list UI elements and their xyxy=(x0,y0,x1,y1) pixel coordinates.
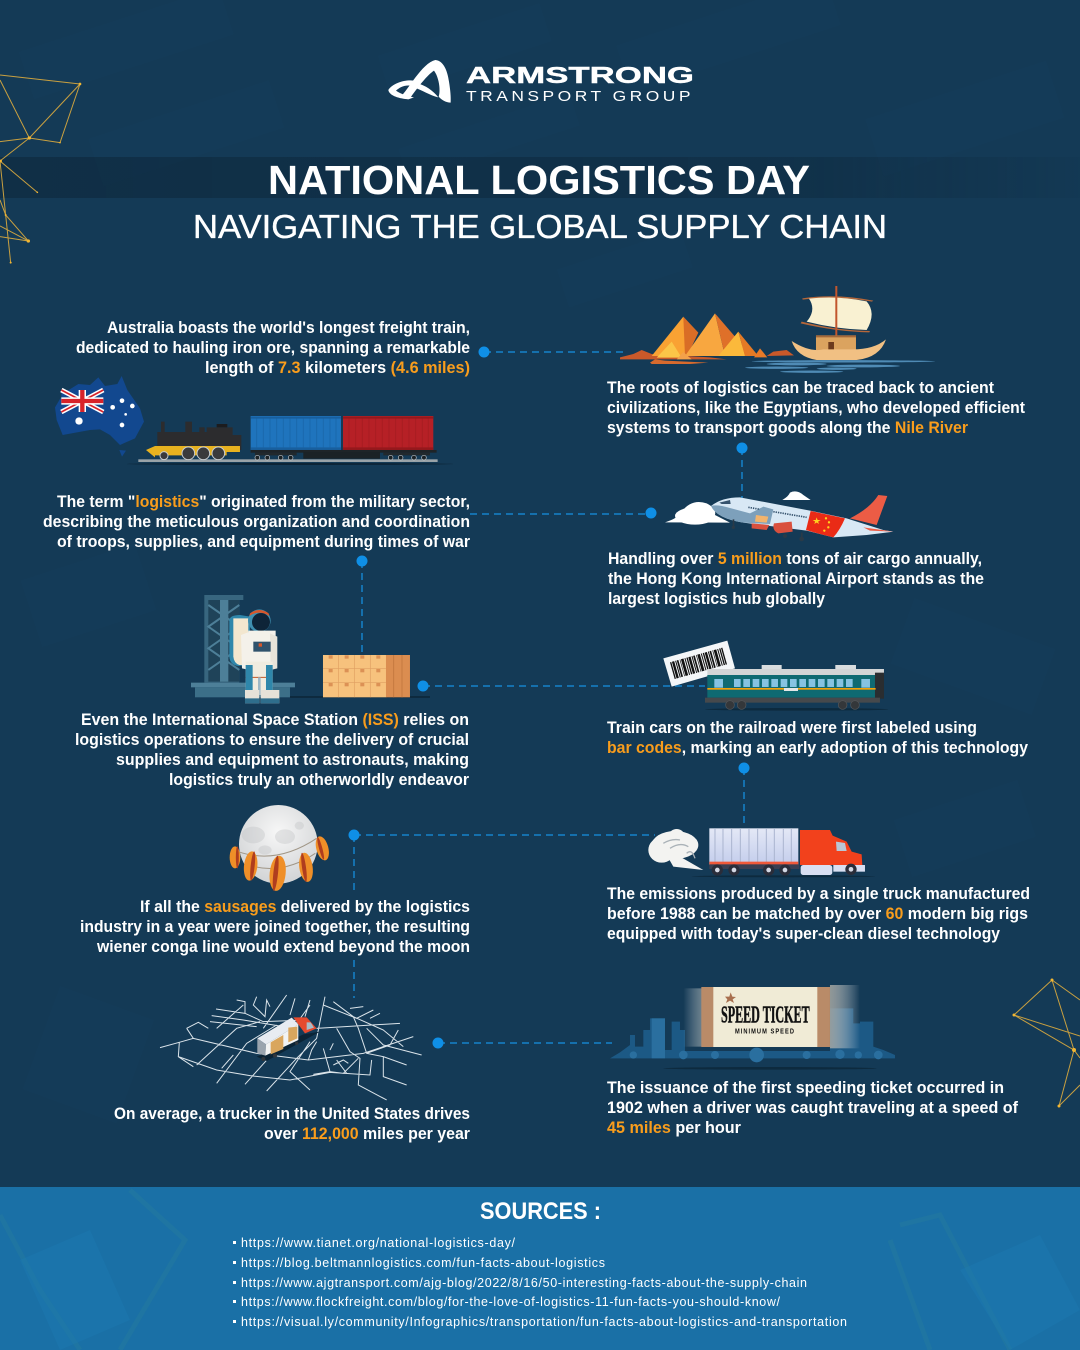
train body xyxy=(705,665,884,709)
text: emissions: before 1988 can be matched by over 60 modern big rigs xyxy=(607,905,1028,923)
cargo door xyxy=(755,515,768,523)
text: sausages: If all the sausages delivered by the logistics xyxy=(140,898,470,916)
illustration: astronaut and cargo xyxy=(191,595,430,703)
rope xyxy=(238,838,317,868)
logo wordmark: ARMSTRONG xyxy=(466,62,694,88)
text: logistics origin xyxy=(43,493,471,551)
sources band xyxy=(0,1187,1080,1350)
text: logistics origin: describing the meticulous organization and coordination xyxy=(43,513,470,531)
text: Egyptians xyxy=(607,379,1025,437)
sources list: https://www.flockfreight.com/blog/for-the-love-of-logistics-11-fun-facts-you-should-know/ xyxy=(241,1295,781,1309)
connector dots xyxy=(348,346,750,1048)
illustration: Australia map and flag xyxy=(55,376,144,457)
water xyxy=(745,360,935,373)
text: air cargo xyxy=(608,550,984,608)
text: bar codes: bar codes, marking an early adoption of this technology xyxy=(607,739,1029,757)
illustration: freight train xyxy=(127,416,453,465)
shadow xyxy=(663,1067,877,1070)
text: International Space Station: logistics operations to ensure the delivery of crucial xyxy=(75,731,469,749)
text: emissions: equipped with today's super-clean diesel technology xyxy=(607,925,1001,943)
ticket xyxy=(701,987,830,1047)
red container xyxy=(343,416,433,450)
pyramids xyxy=(620,313,794,364)
launch tower xyxy=(191,595,295,697)
moon xyxy=(239,805,318,884)
illustration: speeding ticket and skyline xyxy=(610,985,895,1070)
text: longest freight train: length of 7.3 kilometers (4.6 miles) xyxy=(205,359,470,377)
hot dogs xyxy=(230,835,331,892)
text: trucker miles xyxy=(114,1105,471,1143)
truck xyxy=(257,1017,320,1061)
sources list xyxy=(233,1236,847,1329)
locomotive xyxy=(146,422,241,460)
blue container xyxy=(251,416,341,450)
smoke xyxy=(648,829,703,870)
text: emissions: The emissions produced by a single truck manufactured xyxy=(607,885,1030,903)
sources list: https://www.tianet.org/national-logistics-day/ xyxy=(241,1236,516,1250)
text: longest freight train xyxy=(76,319,470,377)
text: bar codes xyxy=(607,719,1029,757)
road network xyxy=(160,995,422,1100)
sources list: https://www.ajgtransport.com/ajg-blog/2022/8/16/50-interesting-facts-about-the-supply-chain xyxy=(241,1276,807,1290)
engines xyxy=(773,522,793,533)
text: Egyptians: systems to transport goods along the Nile River xyxy=(607,419,969,437)
ticket subtext: MINIMUM SPEED xyxy=(735,1027,795,1036)
illustration: cargo plane xyxy=(665,491,893,541)
clouds xyxy=(665,491,811,525)
text: speeding ticket xyxy=(607,1079,1018,1137)
tail fin xyxy=(850,495,887,525)
flag livery xyxy=(806,511,845,537)
Australia map xyxy=(55,376,144,457)
title: NATIONAL LOGISTICS DAY xyxy=(268,157,810,203)
ticket text: SPEED TICKET xyxy=(721,1002,810,1028)
skyline xyxy=(610,1008,895,1062)
network decoration: right xyxy=(1012,978,1080,1108)
text: emissions xyxy=(607,885,1030,943)
text: International Space Station: supplies and equipment to astronauts, making xyxy=(116,751,469,769)
sources heading: SOURCES : xyxy=(480,1198,601,1225)
motion blur xyxy=(683,985,860,1048)
subtitle: NAVIGATING THE GLOBAL SUPPLY CHAIN xyxy=(193,208,887,245)
text: trucker miles: over 112,000 miles per year xyxy=(264,1125,471,1143)
cab xyxy=(800,830,865,875)
illustration: barcode and train car xyxy=(663,641,888,711)
text: speeding ticket: 45 miles per hour xyxy=(607,1119,742,1137)
text: International Space Station xyxy=(75,711,470,789)
network decoration: top left xyxy=(0,75,81,264)
text: air cargo: the Hong Kong International Airport stands as the xyxy=(608,570,984,588)
union flag xyxy=(61,390,103,412)
sources list: https://visual.ly/community/Infographics/transportation/fun-facts-about-logistics-and-transportation xyxy=(241,1315,847,1329)
tail stabilizer xyxy=(863,527,893,532)
text: air cargo: largest logistics hub globally xyxy=(608,590,826,608)
text: speeding ticket: The issuance of the first speeding ticket occurred in xyxy=(607,1079,1004,1097)
text: bar codes: Train cars on the railroad were first labeled using xyxy=(607,719,977,737)
train car shadow xyxy=(705,708,888,711)
text: trucker miles: On average, a trucker in the United States drives xyxy=(114,1105,470,1123)
text: International Space Station: Even the International Space Station (ISS) relies on xyxy=(81,711,469,729)
boat xyxy=(792,286,886,360)
text: logistics origin: of troops, supplies, and equipment during times of war xyxy=(57,533,471,551)
text: sausages: industry in a year were joined together, the resulting xyxy=(80,918,470,936)
logo xyxy=(388,60,694,105)
trailer xyxy=(709,828,799,876)
cockpit and windows xyxy=(719,500,731,504)
astronaut xyxy=(229,609,279,703)
text: Egyptians: The roots of logistics can be traced back to ancient xyxy=(607,379,994,397)
cargo boxes xyxy=(323,655,410,697)
logo mark xyxy=(388,60,451,103)
illustration: road map and truck xyxy=(160,995,422,1100)
sources list: https://blog.beltmannlogistics.com/fun-facts-about-logistics xyxy=(241,1256,605,1270)
text: Egyptians: civilizations, like the Egyptians, who developed efficient xyxy=(607,399,1025,417)
text: logistics origin: The term "logistics" originated from the military sector, xyxy=(57,493,470,511)
illustration: truck and smoke xyxy=(648,828,875,877)
logo tagline: TRANSPORT GROUP xyxy=(466,88,694,105)
connectors xyxy=(354,352,744,1043)
barcode label xyxy=(663,641,735,687)
shadow xyxy=(692,875,875,877)
text: speeding ticket: 1902 when a driver was caught traveling at a speed of xyxy=(607,1099,1018,1117)
text: longest freight train: dedicated to hauling iron ore, spanning a remarkable xyxy=(76,339,470,357)
text: sausages: wiener conga line would extend beyond the moon xyxy=(96,938,470,956)
text: longest freight train: Australia boasts the world's longest freight train, xyxy=(107,319,470,337)
illustration: pyramids and boat xyxy=(620,286,935,373)
landing gear xyxy=(732,519,804,541)
flatcar xyxy=(251,450,437,460)
ground line xyxy=(290,696,430,698)
title band xyxy=(0,157,1080,198)
illustration: moon and sausages xyxy=(230,805,331,892)
stars xyxy=(75,398,135,427)
text: sausages xyxy=(80,898,470,956)
text: air cargo: Handling over 5 million tons of air cargo annually, xyxy=(608,550,982,568)
text: International Space Station: logistics truly an otherworldly endeavor xyxy=(169,771,470,789)
rail xyxy=(127,459,453,465)
fuselage xyxy=(711,497,893,537)
